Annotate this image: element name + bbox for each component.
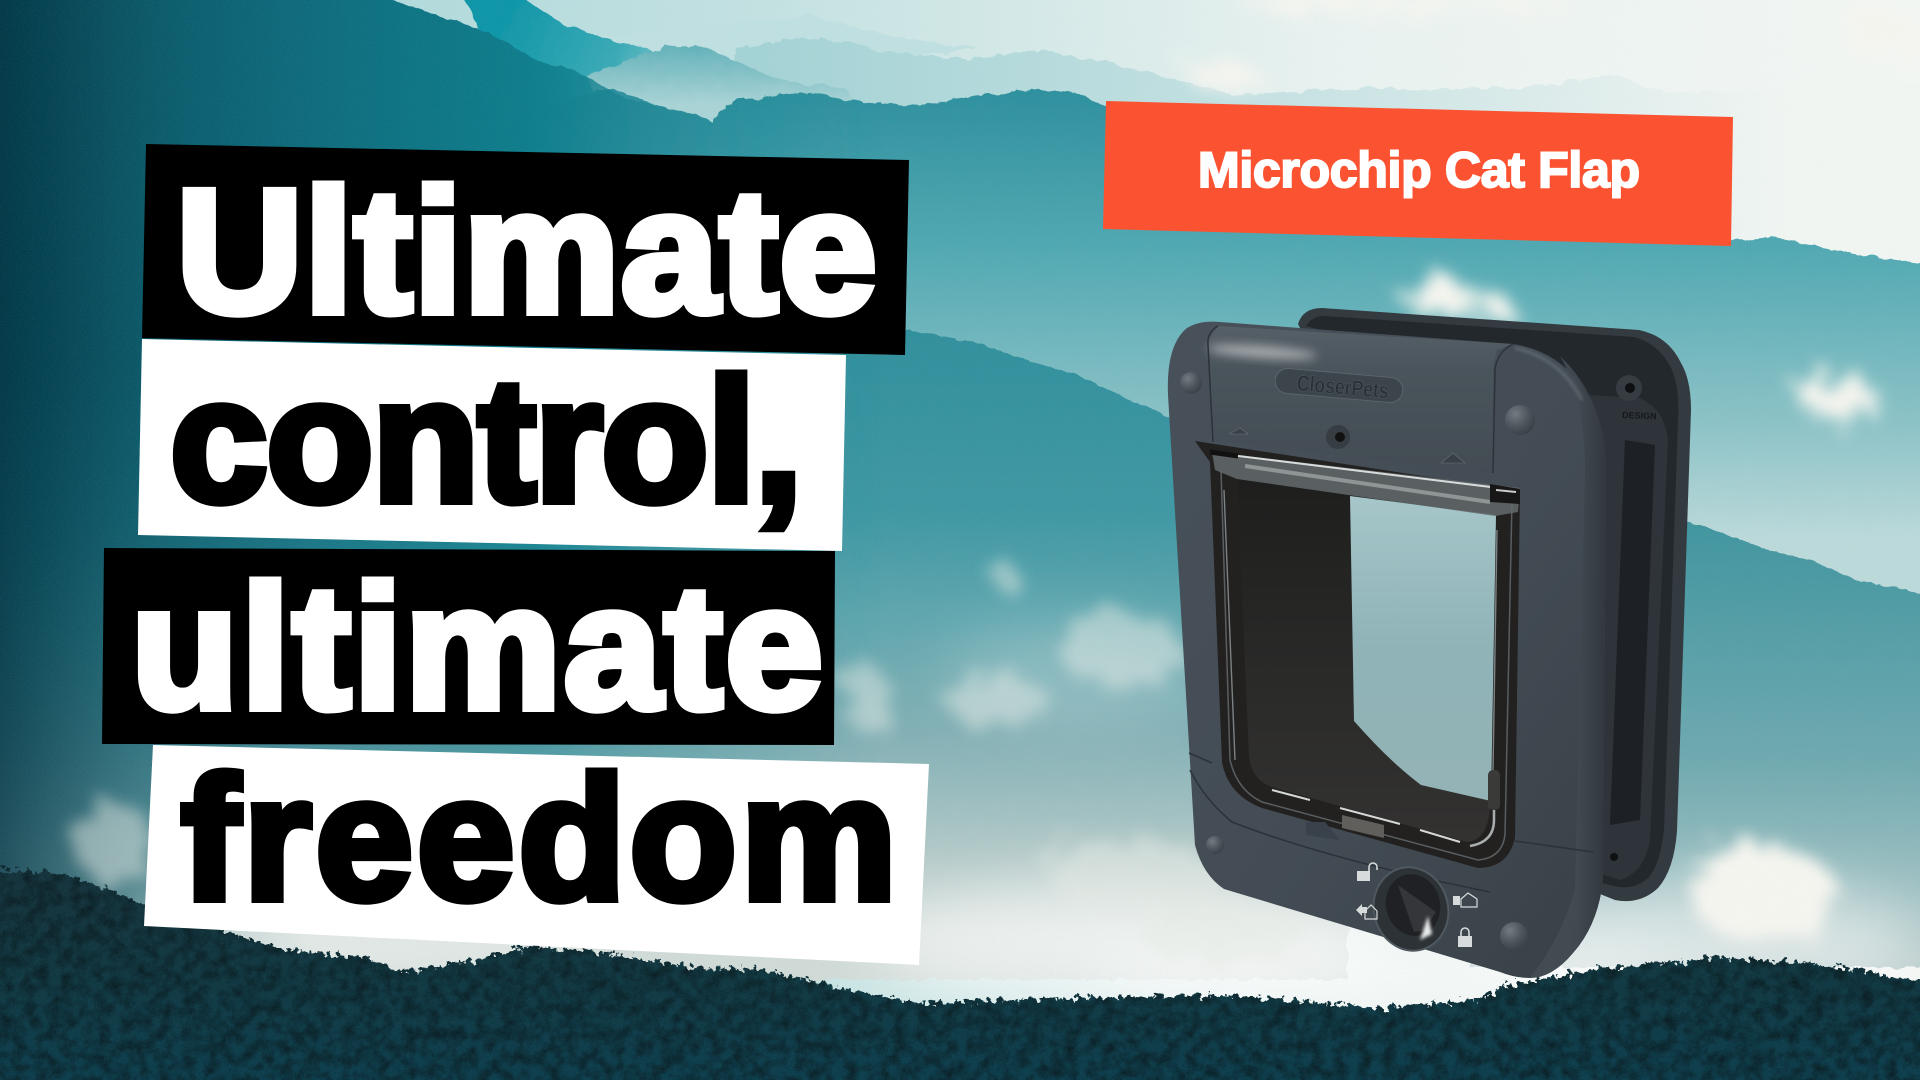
clear flap side rails: [1224, 490, 1497, 846]
flap opening frame: [1195, 441, 1520, 868]
label banner: Microchip Cat Flap: [1103, 101, 1733, 246]
headline: Ultimate control, ultimate freedom: [102, 144, 929, 965]
rear frame: [1298, 308, 1691, 901]
top sensor panel: [1208, 326, 1513, 473]
pale ridge: [735, 38, 1920, 367]
lower right ridge: [1469, 520, 1920, 967]
clear flap top bar: [1210, 452, 1520, 516]
right side shading: [1530, 356, 1606, 978]
banner: black, ultimate: ultimate: [131, 550, 823, 746]
rail clip: [1488, 770, 1500, 810]
banner: black, Ultimate: Ultimate: [176, 154, 877, 350]
soft mist glows: [122, 624, 1920, 1010]
dark tunnel interior: [1237, 477, 1494, 842]
product: grey cat flap: [1168, 308, 1691, 978]
seams: [1189, 326, 1593, 892]
bottom latch: [1306, 815, 1384, 840]
icon: in only: [1356, 904, 1377, 919]
bright teal slope: [465, 0, 698, 135]
left large dark mountain: [0, 0, 842, 930]
rear screw holes: [1616, 375, 1642, 401]
see-through sky window: [1350, 496, 1496, 801]
front teal ridge: [0, 88, 1920, 698]
banner: white, freedom: freedom: [181, 741, 897, 937]
mode icons: [1356, 863, 1477, 947]
small blue mountain: [588, 44, 882, 135]
label banner: Microchip Cat Flap: Microchip Cat Flap: [1198, 142, 1640, 198]
icon: locked: [1458, 928, 1472, 947]
corner highlight: [1515, 348, 1582, 400]
corner screws: [1180, 372, 1535, 950]
sensor hole: [1326, 425, 1350, 449]
logo plate: CloserPets: [1296, 370, 1390, 403]
panel highlight: [1207, 342, 1317, 362]
clouds: [1188, 0, 1920, 943]
selector dial: [1364, 859, 1458, 959]
panel arrows: [1229, 428, 1465, 463]
icon: out only: [1453, 893, 1477, 907]
front housing: [1168, 322, 1606, 978]
moulded text: DESIGN: [1622, 410, 1657, 421]
banner: white, control,: control,: [170, 343, 803, 539]
far pale ridge: [600, 15, 980, 73]
middle ridge: [0, 321, 1347, 980]
dark forest ridge: [0, 867, 1920, 1080]
icon: unlocked: [1357, 863, 1377, 881]
wispy clouds: [80, 566, 1310, 965]
opening rim highlight: [1221, 470, 1512, 860]
